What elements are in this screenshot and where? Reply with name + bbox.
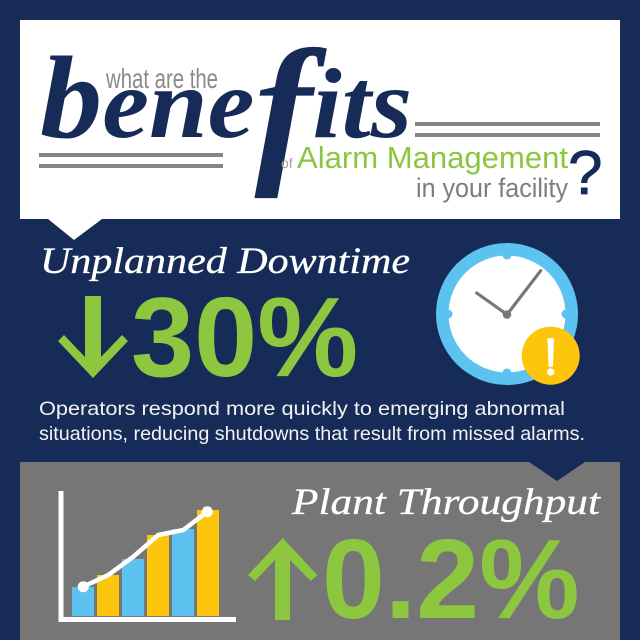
heading: Unplanned Downtime: Unplanned Downtime <box>40 241 410 282</box>
text: description: situations, reducing shutdowns that result from missed alarms. <box>39 423 585 445</box>
text: in your facility: in your facility <box>416 173 568 203</box>
rules: left <box>39 153 223 168</box>
text: of: of <box>281 155 293 171</box>
icon: down arrow <box>58 296 128 378</box>
heading: Plant Throughput: Plant Throughput <box>291 482 602 523</box>
text: description: Operators respond more quickly to emerging abnormal <box>39 398 565 420</box>
panel: plant throughput <box>20 462 620 640</box>
icon: up arrow <box>248 538 317 620</box>
heading: benefits: f <box>254 16 327 199</box>
stat: 0.2%: 0.2% <box>322 516 580 640</box>
icon: clock with alert <box>436 243 580 385</box>
panel: header <box>20 16 620 240</box>
heading: benefits: its <box>312 48 412 159</box>
stat: 30%: 30% <box>131 274 358 401</box>
heading: benefits: bene <box>40 32 247 163</box>
text: description <box>39 398 585 445</box>
question mark: ? <box>568 139 602 208</box>
heading: Alarm Management: Alarm Management <box>297 140 568 175</box>
chart: rising bars with trend line <box>61 491 236 620</box>
heading: what are the: what are the <box>105 63 218 94</box>
rules: right <box>415 122 600 137</box>
